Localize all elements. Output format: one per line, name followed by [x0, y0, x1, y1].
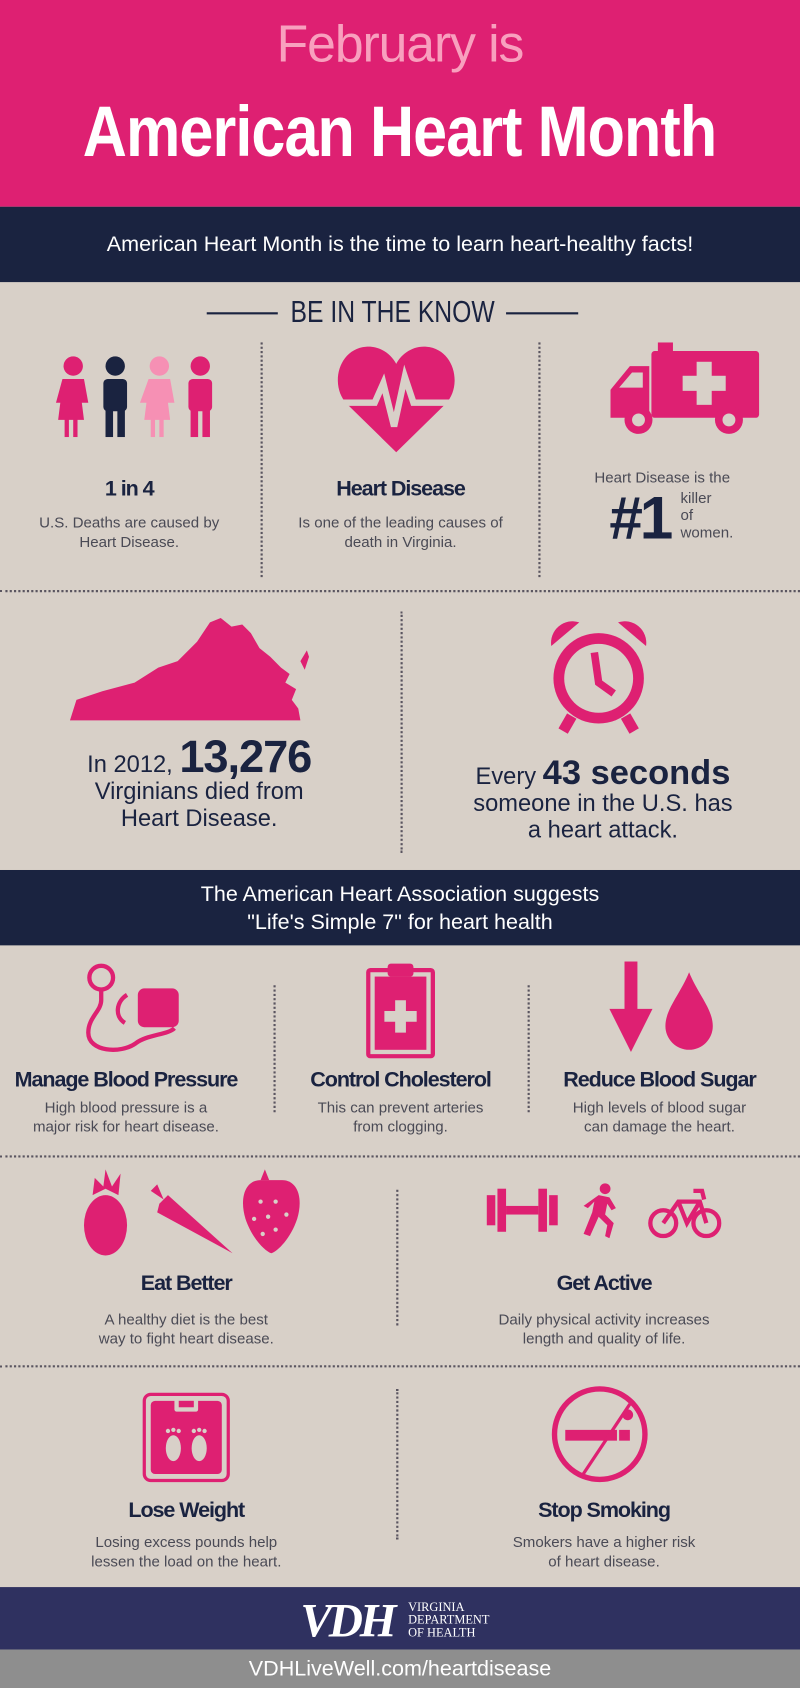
item: manage blood pressure: High blood pressure is a [45, 1098, 207, 1115]
item: get active: Daily physical activity increases [498, 1310, 710, 1328]
icon: scale [142, 1392, 230, 1482]
item: stop smoking: Stop Smoking [538, 1499, 670, 1522]
item: reduce blood sugar: can damage the heart. [584, 1118, 735, 1135]
item: manage blood pressure: Manage Blood Pressure [15, 1068, 237, 1092]
stat: heart disease: Heart Disease [336, 477, 465, 501]
stat: heart disease: death in Virginia. [345, 533, 457, 550]
stat: 13,276: In 2012, 13,276 [87, 731, 311, 782]
title: American Heart Month [83, 92, 717, 171]
item: reduce blood sugar: High levels of blood sugar [573, 1098, 746, 1115]
stat: #1 killer: killer [680, 489, 711, 506]
stat: heart disease: Is one of the leading causes of [298, 514, 503, 531]
item: eat better [98, 1272, 274, 1347]
navy banner 1 [0, 207, 800, 282]
item: reduce blood sugar [563, 1068, 756, 1135]
navy banner 2: "Life's Simple 7" for heart health [247, 911, 553, 935]
item: get active [498, 1272, 710, 1347]
item: control cholesterol: This can prevent arteries [318, 1098, 483, 1115]
icon: people [56, 356, 212, 438]
stat: #1 killer: of [680, 506, 693, 523]
item: reduce blood sugar: Reduce Blood Sugar [563, 1068, 756, 1092]
footer: VDH logo: OF HEALTH [408, 1627, 475, 1640]
item: stop smoking [513, 1499, 696, 1570]
footer: url: VDHLiveWell.com/heartdisease [249, 1657, 551, 1681]
icon: heart [338, 346, 455, 452]
item: lose weight: Lose Weight [128, 1499, 244, 1522]
stat: 43 seconds: someone in the U.S. has [473, 789, 733, 816]
icon: clipboard [366, 964, 435, 1058]
item: control cholesterol: from clogging. [353, 1118, 448, 1135]
item: eat better: A healthy diet is the best [105, 1310, 268, 1328]
stat: heart disease [298, 477, 503, 550]
item: lose weight [91, 1499, 281, 1570]
stat: #1 killer: #1 [609, 483, 670, 551]
stat: 43 seconds: a heart attack. [528, 816, 678, 843]
navy banner 2: The American Heart Association suggests [201, 883, 599, 907]
item: manage blood pressure [15, 1068, 238, 1135]
icon: ambulance [610, 342, 760, 434]
heading: be in the know: BE IN THE KNOW [290, 295, 495, 328]
stat: 1 in 4: U.S. Deaths are caused by [39, 514, 219, 531]
navy banner 2 [0, 870, 800, 945]
stat: 43 seconds: Every 43 seconds [476, 753, 730, 791]
icon: no smoking [552, 1386, 648, 1482]
stat: 43 seconds [473, 753, 733, 843]
header [0, 0, 800, 207]
icon: exercise [486, 1183, 722, 1238]
item: eat better: way to fight heart disease. [99, 1330, 274, 1347]
item: stop smoking: of heart disease. [548, 1553, 660, 1570]
icon: virginia map [70, 618, 309, 720]
footer: VDH logo: VIRGINIA [408, 1601, 464, 1614]
stat: 13,276: Virginians died from [95, 777, 304, 804]
item: get active: Get Active [557, 1272, 652, 1295]
stat: #1 killer: women. [680, 523, 733, 541]
icon: alarm clock [551, 621, 646, 734]
stat: 1 in 4: Heart Disease. [79, 533, 179, 550]
footer: VDH logo [0, 1587, 800, 1650]
stat: #1 killer [594, 468, 733, 551]
item: control cholesterol [310, 1068, 491, 1135]
icon: blood pressure [86, 964, 179, 1052]
item: get active: length and quality of life. [523, 1330, 685, 1347]
item: eat better: Eat Better [141, 1272, 232, 1295]
stat: 13,276 [87, 731, 311, 831]
item: lose weight: Losing excess pounds help [95, 1533, 277, 1550]
item: lose weight: lessen the load on the heart. [91, 1553, 281, 1570]
stat: #1 killer: Heart Disease is the [594, 468, 730, 486]
stat: 13,276: Heart Disease. [121, 804, 278, 831]
stat: 1 in 4: 1 in 4 [105, 477, 153, 501]
item: manage blood pressure: major risk for heart disease. [33, 1118, 219, 1135]
icon: fruits and vegetables [84, 1170, 300, 1256]
icon: arrow and drop [610, 962, 713, 1052]
stat: 1 in 4 [39, 477, 220, 550]
item: control cholesterol: Control Cholesterol [310, 1068, 491, 1092]
footer: VDH logo: VDH [300, 1595, 393, 1647]
footer: VDH logo: DEPARTMENT [408, 1614, 489, 1627]
footer: url [0, 1650, 800, 1688]
item: stop smoking: Smokers have a higher risk [513, 1533, 695, 1550]
navy banner 1: American Heart Month is the time to learn heart-healthy facts! [107, 233, 693, 256]
subtitle: February is: February is [277, 16, 523, 73]
